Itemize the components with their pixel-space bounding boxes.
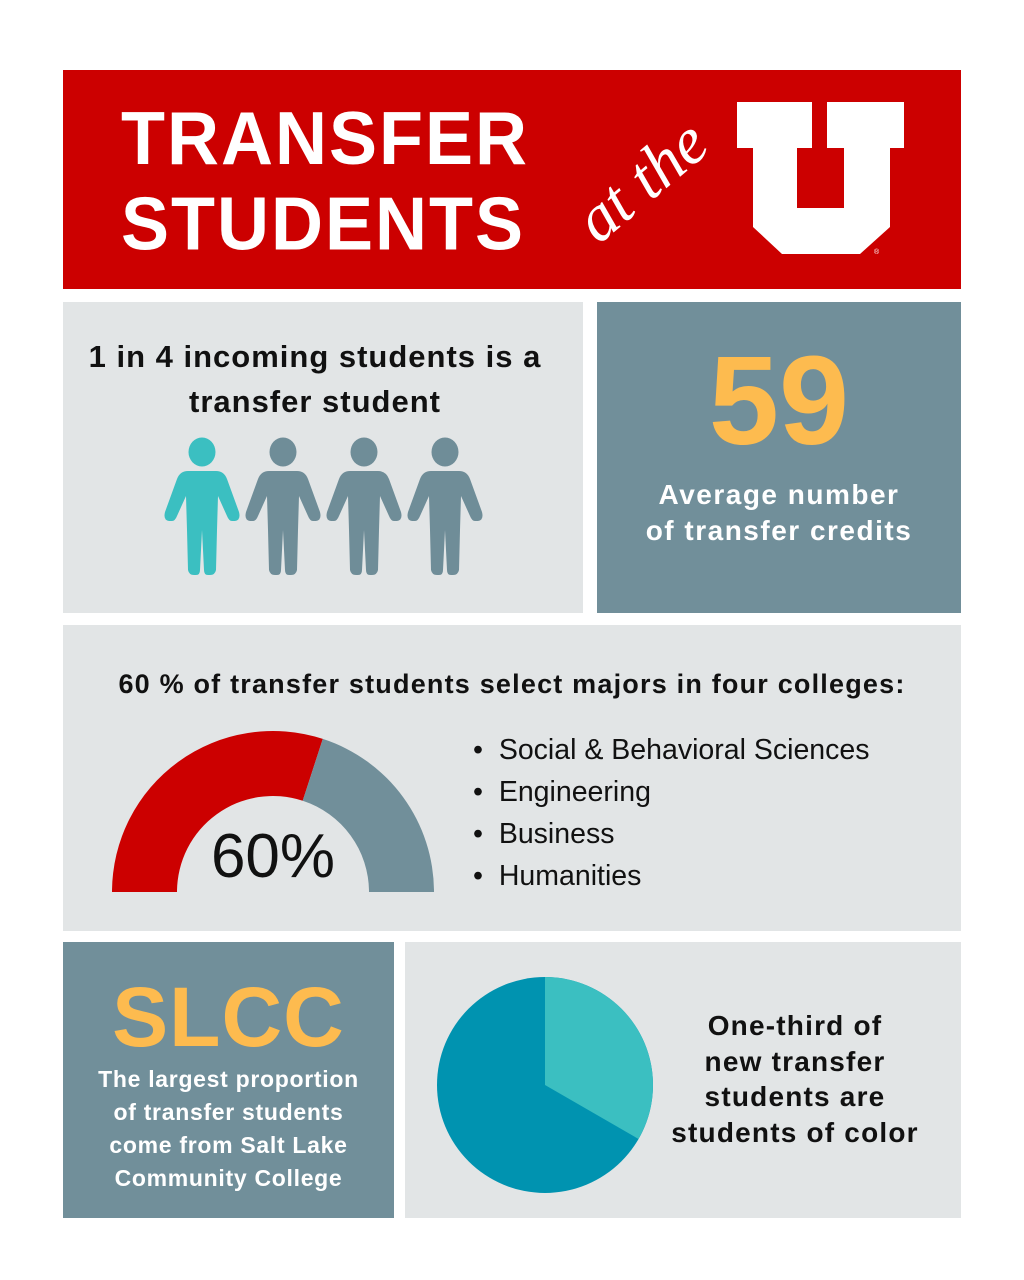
title — [121, 97, 529, 266]
caption: of transfer students — [114, 1099, 343, 1125]
list of colleges: • Business — [473, 818, 614, 850]
chart: gauge 60%: 60% — [211, 822, 335, 891]
caption — [646, 479, 912, 546]
heading: 60 % of transfer students select majors in four colleges: — [118, 669, 906, 699]
panel: majors — [63, 625, 961, 931]
caption: come from Salt Lake — [109, 1132, 348, 1158]
list of colleges: • Engineering — [473, 776, 651, 808]
header panel — [63, 70, 961, 289]
logo: block U — [737, 102, 904, 256]
script text: at the: at the — [561, 105, 722, 257]
caption: Average number — [659, 479, 899, 510]
title: STUDENTS — [121, 182, 525, 266]
caption: of transfer credits — [646, 515, 912, 546]
caption: students are — [705, 1081, 885, 1112]
panel: 59 credits — [597, 302, 961, 613]
list of colleges: • Humanities — [473, 860, 641, 892]
logo: block U: ® — [874, 248, 880, 256]
caption: Community College — [115, 1165, 342, 1191]
caption: students of color — [671, 1116, 919, 1148]
heading: 1 in 4 incoming students is a — [89, 339, 541, 374]
big text: SLCC — [112, 970, 345, 1064]
caption — [98, 1066, 359, 1191]
list of colleges — [473, 734, 870, 892]
big number: 59 — [709, 330, 849, 471]
chart: gauge 60% — [112, 731, 434, 892]
heading — [89, 339, 541, 419]
caption: The largest proportion — [98, 1066, 359, 1092]
caption — [671, 1010, 919, 1148]
heading: transfer student — [189, 384, 441, 419]
title: TRANSFER — [121, 97, 529, 181]
icon: people — [164, 438, 482, 575]
caption: new transfer — [705, 1046, 885, 1076]
panel: students of color — [405, 942, 961, 1218]
caption: One-third of — [708, 1010, 882, 1041]
chart: pie one-third — [437, 977, 653, 1193]
list of colleges: • Social & Behavioral Sciences — [473, 734, 870, 766]
panel: 1 in 4 — [63, 302, 583, 613]
panel: SLCC — [63, 942, 394, 1218]
